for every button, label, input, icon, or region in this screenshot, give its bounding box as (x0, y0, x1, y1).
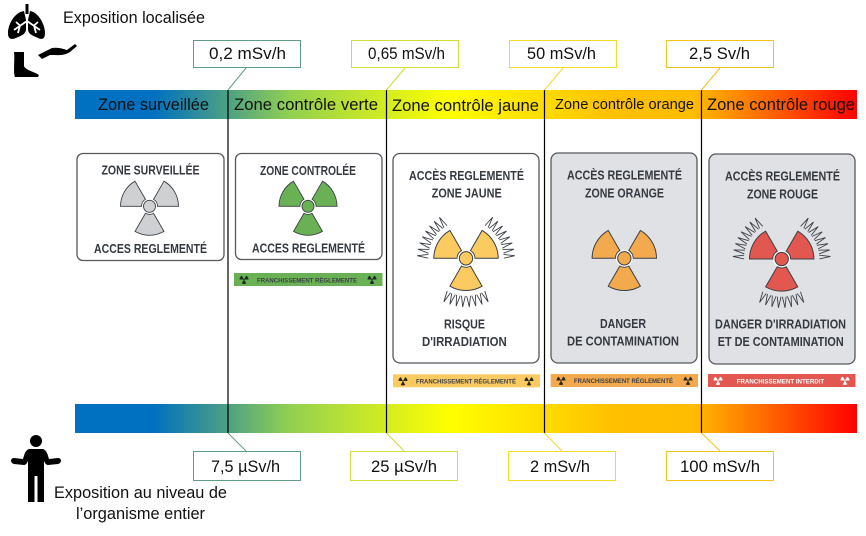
panel: zone rouge sign (709, 154, 855, 364)
panel: zone jaune sign: RISQUE (444, 316, 485, 331)
zone labels: Zone contrôle verte (234, 96, 378, 114)
callout: 2 mSv/h (508, 433, 616, 480)
callout: 50 mSv/h (510, 40, 616, 90)
callout: 0,2 mSv/h: 0,2 mSv/h (209, 45, 286, 63)
panel: zone surveillée sign: ZONE SURVEILLÉE (102, 162, 200, 178)
zone labels: Zone surveillée (98, 96, 209, 114)
yellow barrier tape: FRANCHISSEMENT RÉGLEMENTÉ (416, 377, 516, 385)
zone labels: Zone contrôle orange (555, 96, 694, 113)
zone labels: Zone contrôle rouge (707, 96, 855, 114)
callout: 100 mSv/h: 100 mSv/h (680, 458, 760, 476)
panel: zone jaune sign: D'IRRADIATION (422, 334, 507, 349)
callout: 7,5 µSv/h: 7,5 µSv/h (211, 458, 280, 476)
panel: zone orange sign: DE CONTAMINATION (567, 334, 679, 349)
orange barrier tape (551, 374, 698, 387)
panel: zone orange sign (551, 153, 697, 363)
callout: 25 µSv/h: 25 µSv/h (371, 458, 437, 476)
heading: exposition au niveau de l'organisme entier: l’organisme entier (76, 505, 205, 523)
panel: zone contrôlée sign (236, 154, 382, 260)
bottom gradient bar (75, 404, 857, 433)
heading: exposition localisée: Exposition localisée (63, 9, 205, 27)
callout: 100 mSv/h (666, 433, 774, 480)
panel: zone surveillée sign: ACCES REGLEMENTÉ (94, 241, 207, 256)
panel: zone contrôlée sign: ACCES REGLEMENTÉ (252, 241, 365, 256)
callout: 0,65 mSv/h: 0,65 mSv/h (368, 45, 445, 63)
green barrier tape: FRANCHISSEMENT RÉGLEMENTE (257, 276, 357, 284)
zone labels (98, 96, 855, 115)
panel: zone orange sign: DANGER (600, 316, 646, 331)
zone labels: Zone contrôle jaune (392, 97, 539, 115)
callout: 7,5 µSv/h (194, 433, 300, 480)
panel: zone jaune sign: ZONE JAUNE (432, 186, 502, 201)
panel: zone rouge sign: ACCÈS REGLEMENTÉ (725, 168, 840, 183)
panel: zone surveillée sign (77, 154, 224, 260)
top gradient bar (75, 90, 857, 119)
red barrier tape (708, 374, 856, 387)
zone boundary lines (228, 90, 702, 433)
icon: foot (14, 52, 39, 77)
callout: 50 mSv/h: 50 mSv/h (527, 45, 596, 63)
icon: person (11, 435, 61, 502)
yellow barrier tape (393, 374, 540, 387)
heading: exposition au niveau de l'organisme entier (54, 484, 227, 523)
panel: zone contrôlée sign: ZONE CONTROLÉE (260, 163, 356, 178)
callout: 2 mSv/h: 2 mSv/h (530, 458, 590, 476)
panel: zone rouge sign: ET DE CONTAMINATION (718, 334, 844, 349)
heading: exposition au niveau de l'organisme entier: Exposition au niveau de (54, 484, 227, 502)
icon: hand (38, 44, 77, 59)
callout: 2,5 Sv/h: 2,5 Sv/h (689, 45, 750, 63)
callout: 0,65 mSv/h (352, 40, 458, 90)
panel: zone orange sign: ZONE ORANGE (585, 185, 664, 200)
panel: zone orange sign: ACCÈS REGLEMENTÉ (567, 167, 682, 182)
orange barrier tape: FRANCHISSEMENT RÉGLEMENTÉ (574, 377, 673, 385)
panel: zone jaune sign: ACCÈS REGLEMENTÉ (409, 168, 524, 183)
callout: 25 µSv/h (350, 433, 458, 480)
callout: 2,5 Sv/h (666, 40, 774, 90)
green barrier tape (234, 273, 382, 286)
icon: lungs (8, 4, 45, 39)
panel: zone rouge sign: ZONE ROUGE (747, 186, 818, 201)
red barrier tape: FRANCHISSEMENT INTERDIT (737, 378, 824, 385)
panel: zone jaune sign (393, 154, 539, 363)
callout: 0,2 mSv/h (194, 40, 300, 90)
